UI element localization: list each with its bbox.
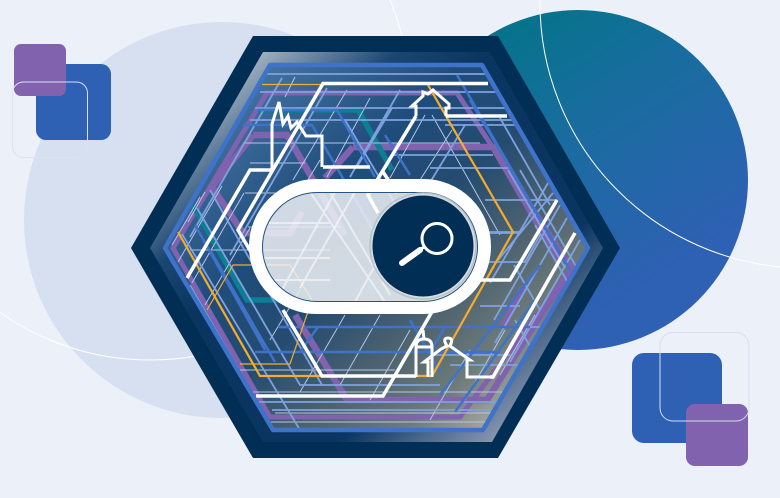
decorative squares: top left: [12, 44, 111, 158]
building icon: barn: [424, 338, 493, 377]
blue lines: [195, 75, 570, 412]
gold lines: [178, 84, 513, 376]
building icon: silo: [416, 330, 432, 377]
hexagon frame: [131, 36, 620, 458]
pale background circle: [24, 22, 420, 418]
thin arc: left: [0, 0, 410, 360]
thin lattice lines: [172, 77, 535, 422]
teal to blue gradient circle: [408, 10, 748, 350]
network of lines: [172, 74, 585, 430]
thin arc: right: [540, 0, 780, 268]
icon: magnifying glass: [402, 224, 452, 263]
search button halo: [370, 193, 476, 299]
white connector lines: [187, 84, 575, 396]
building icon: factory: [272, 102, 322, 169]
purple lines: [173, 93, 573, 417]
pill ring: [256, 186, 484, 308]
light blue lines: [182, 74, 585, 430]
search pill glass: [256, 186, 484, 308]
search pill: [256, 186, 484, 308]
pill inner outline: [262, 192, 478, 302]
building icon: house: [412, 90, 449, 116]
teal lines: [193, 110, 392, 300]
search button circle: [372, 196, 474, 296]
lattice seen through the pill: [262, 192, 400, 302]
decorative squares: bottom right: [632, 332, 749, 466]
hexagon blue border: [165, 65, 588, 430]
